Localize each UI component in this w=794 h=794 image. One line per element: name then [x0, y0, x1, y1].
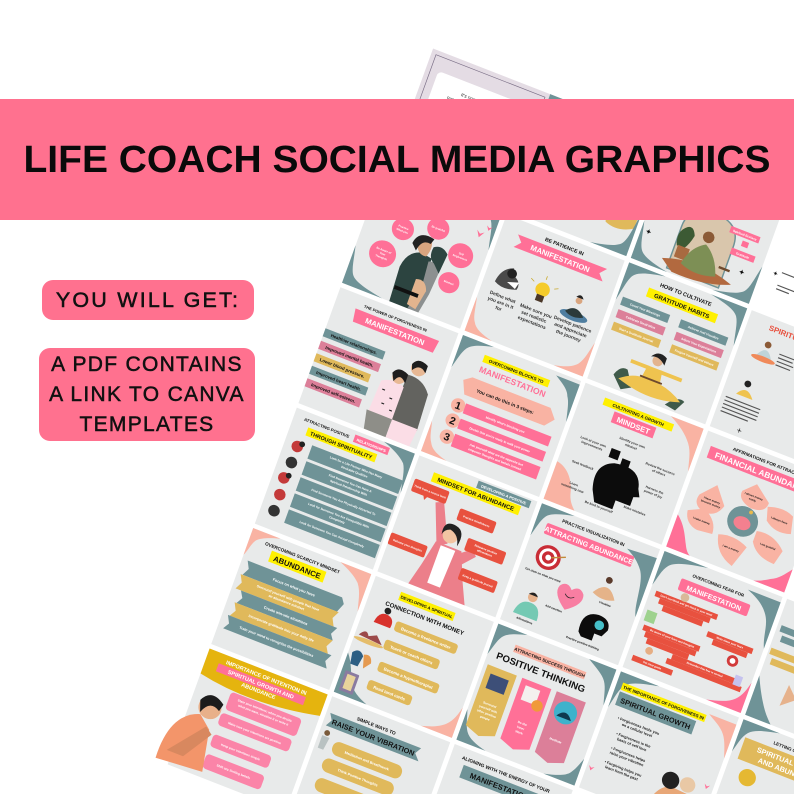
- intention bubbles: Shift any limiting beliefs: [216, 763, 251, 780]
- meditating figure: [610, 340, 697, 413]
- icon: thinking woman: [494, 263, 524, 293]
- speech bubbles: Think from a source level: [414, 484, 447, 500]
- column: mustard: people: [480, 714, 490, 722]
- card: attracting success positive thinking: [456, 624, 616, 786]
- step 1: 1: [453, 400, 463, 413]
- thinking man: [155, 683, 228, 775]
- benefit bars: Improved self-esteem.: [310, 382, 356, 404]
- card: text list spilling off right edge: ✦: [772, 270, 779, 278]
- three tips: Develop patience: [553, 315, 592, 335]
- column: mauve: [533, 691, 586, 769]
- card: attracting positive relationships: [255, 408, 415, 570]
- relationship bars: Desirable Qualities: [341, 465, 368, 479]
- intention bubbles: State your intentions; when you decide: [237, 698, 293, 723]
- card: cultivating a growth mindset: [544, 383, 704, 545]
- growth tips: Make mistakes: [623, 505, 646, 517]
- card: be patience in manifestation: [465, 215, 625, 377]
- red text blocks: Don't overthink and get stuck in your mind: [660, 593, 713, 617]
- ribbons: an abundance mindset: [268, 594, 305, 612]
- intention bubbles: what you want, visualize it or write it: [237, 703, 289, 727]
- card: importance of intention: ABUNDANCE: [240, 682, 276, 701]
- card: importance of intention: [155, 643, 328, 794]
- plant and pot: [671, 224, 697, 261]
- growth tips: Identify your own: [619, 436, 646, 450]
- growth tips: power of joy: [643, 489, 663, 500]
- title: ATTRACTING POSITIVE: [303, 417, 350, 439]
- step 3: empower thoughts and beliefs instead: [468, 447, 522, 471]
- card: how to cultivate gratitude habits: [587, 262, 747, 424]
- bullet list: raise your vibration: [609, 751, 645, 768]
- card: power of forgiveness: [298, 287, 458, 449]
- speech bubbles: [385, 477, 521, 593]
- habit tags: Count Your Blessings: [629, 302, 661, 318]
- bullet list: • Forgiveness heals you: [617, 716, 660, 736]
- subtitle ribbon: [459, 375, 558, 429]
- step 2: Decide that you're ready to walk your power: [469, 426, 531, 454]
- red text blocks: Be aware of your fears and thoughts: [650, 628, 695, 649]
- card: teal corner template: [508, 94, 668, 256]
- title: BE PATIENCE IN: [544, 237, 585, 258]
- card: lilac paper: [391, 48, 551, 210]
- pink advice circles: [365, 198, 482, 298]
- growth tips: Learn: [569, 481, 579, 488]
- column: pink: Do the: [517, 720, 528, 727]
- card: importance of forgiveness: THE IMPORTANCE OF FORGIVENESS IN: [622, 685, 705, 721]
- step 1: [449, 396, 552, 448]
- affirmation petals: I make money: [692, 515, 711, 526]
- pink advice circles: Be Aware of: [376, 245, 392, 255]
- card: lilac paper: It's normal to feel: [460, 92, 496, 111]
- callout: what the pdf contains: [39, 348, 255, 441]
- small icons: [633, 582, 763, 690]
- pink advice circles: Mindset: [443, 279, 454, 286]
- affirmation petals: I have money: [703, 495, 721, 505]
- card: cultivating a growth mindset: CULTIVATING A GROWTH: [612, 403, 665, 427]
- growth tips: Be kind to yourself: [584, 500, 614, 515]
- benefit bars: Healthier relationships.: [330, 333, 378, 355]
- speech bubbles: affirmations: [476, 548, 493, 558]
- speech bubbles: Practice mindfulness: [463, 514, 491, 528]
- affirmation petals: easily: [748, 497, 757, 503]
- three tips: [484, 290, 592, 347]
- column: mustard: [464, 664, 517, 742]
- card: practice visualization: Get clear on what you want: [525, 566, 561, 584]
- affirmation petals: I always have: [770, 515, 789, 526]
- intention bubbles: [202, 691, 302, 794]
- ribbons: Surround yourself with people that have: [256, 584, 320, 612]
- icon: yoga person: [592, 573, 621, 603]
- pills: Think Positive Thoughts: [337, 768, 378, 788]
- card: overcoming blocks to manifestation: [421, 335, 581, 497]
- step 3: 3: [442, 431, 452, 444]
- relationship bars: Look for Someone You Are Compatible With: [308, 502, 370, 529]
- card: overcoming scarcity mindset: ABUNDANCE: [272, 554, 322, 581]
- pink advice circles: Be grateful: [431, 224, 446, 233]
- card: spiritual figures: [710, 310, 794, 472]
- card: attracting positive relationships: THROUGH SPIRITUALITY: [309, 431, 373, 461]
- embracing couple: [360, 349, 440, 447]
- bullet list: on a cellular level: [621, 723, 653, 738]
- income ideas: Become a freelance writer: [400, 626, 452, 650]
- card: overcoming blocks to manifestation: OVERCOMING BLOCKS TO: [488, 358, 545, 385]
- relationship bars: Look for a Life Partner Who Has Many: [329, 455, 383, 479]
- habit tags: Celebrate Small Wins: [625, 315, 656, 330]
- card: right edge spiritual list: [745, 599, 794, 761]
- three tips: set realistic: [520, 310, 547, 325]
- red text blocks: [631, 591, 762, 701]
- growth tips: of others: [651, 468, 666, 477]
- card: how to cultivate gratitude habits: GRATITUDE HABITS: [653, 293, 710, 320]
- card: developing a spiritual connection: CONNECTION WITH MONEY: [384, 600, 465, 637]
- card: meditation woman: Gratitude: [735, 251, 750, 260]
- title: [482, 355, 550, 387]
- card: text list spilling off right edge: [753, 190, 794, 352]
- habit tags: Adjust Your Expectations: [681, 337, 717, 354]
- income ideas: Read tarot cards: [373, 685, 406, 702]
- speech bubbles: Reframe your thoughts: [392, 538, 423, 553]
- card: meditation woman: ✦: [644, 227, 653, 237]
- pink advice circles: Practice: [398, 224, 410, 231]
- affirmation petals: because money: [700, 498, 721, 510]
- kissing couple: [387, 201, 493, 327]
- title: [603, 398, 674, 432]
- ribbons: Create win-win situations: [263, 606, 308, 626]
- card: lilac paper: overwhelmed sometimes: [446, 95, 498, 120]
- title banner: LIFE COACH SOCIAL MEDIA GRAPHICS: [24, 139, 770, 181]
- step 2: 2: [448, 415, 457, 428]
- title: SIMPLE WAYS TO: [356, 716, 397, 737]
- benefit bars: [305, 328, 385, 410]
- habit tags: Forgive Yourself and Others: [674, 348, 714, 367]
- affirmation petals: [675, 464, 794, 582]
- bullet list: basis of self love: [616, 737, 647, 752]
- card: mindset for abundance: MINDSET FOR ABUNDANCE: [436, 477, 515, 513]
- title: HOW TO CULTIVATE: [659, 283, 712, 308]
- growth tips: something new: [561, 482, 585, 494]
- ribbons: Focus on what you have: [272, 578, 315, 598]
- card: practice visualization: Affirmations: [516, 616, 533, 626]
- habit tags: Start a Gratitude Journal: [618, 327, 654, 344]
- bullet list: learn from the past: [604, 765, 639, 782]
- card: simple ways to raise your vibration: RAISE YOUR VIBRATION: [331, 717, 416, 758]
- growth tips: improvements: [581, 440, 603, 452]
- icon: target: [532, 541, 568, 575]
- card: attracting success positive thinking: ATTRACTING SUCCESS THROUGH: [514, 646, 586, 678]
- income ideas: [366, 619, 459, 715]
- card: financial abundance affirmations: [666, 431, 794, 593]
- icon: head silhouette: [576, 610, 612, 645]
- column: mustard: Surround: [483, 700, 497, 709]
- red text blocks: Write down your fears: [716, 636, 744, 650]
- three tips: expectations: [517, 315, 547, 331]
- column: mustard: other positive: [476, 708, 497, 719]
- card: practice visualization: [500, 503, 660, 665]
- three tips: and appreciate: [553, 321, 588, 340]
- icon: piggy bank: [723, 501, 762, 541]
- card: practice visualization: ATTRACTING ABUNDANCE: [543, 525, 634, 567]
- card: practice visualization: Visualize: [598, 600, 612, 608]
- pink advice circles: Your: [379, 251, 386, 257]
- card: cultivating a growth mindset: MINDSET: [615, 415, 651, 436]
- card: letting go of spiritual abundance: [702, 719, 794, 794]
- title banner: [0, 99, 794, 220]
- couple icons: [265, 437, 306, 519]
- column: pink: Work: [515, 729, 524, 736]
- title: [398, 592, 456, 621]
- step 3: Ask yourself what are the opposite but: [469, 443, 524, 467]
- woman in pink suit: [406, 499, 495, 605]
- pills: [313, 739, 404, 794]
- card: developing a spiritual connection: [334, 576, 494, 738]
- card: attracting positive relationships: RELATIONSHIPS: [356, 438, 387, 453]
- column: mauve: Meditate: [549, 736, 562, 745]
- callout: what the pdf contains: TEMPLATES: [79, 413, 214, 436]
- speech bubbles: Keep a gratitude journal: [462, 573, 493, 589]
- red text blocks: Remember that fear is normal: [686, 661, 723, 678]
- card: aligning with the energy: ALIGNING WITH THE ENERGY OF YOUR: [461, 755, 551, 794]
- card: meditation woman: ✦: [738, 268, 746, 277]
- affirmation petals: I am a money: [722, 543, 740, 553]
- title: PRACTICE VISUALIZATION IN: [562, 518, 626, 548]
- step 2: [444, 411, 547, 463]
- pink advice circles: What you: [396, 227, 409, 235]
- card: mindset for abundance: DEVELOPING A POSITIVE: [480, 485, 527, 506]
- relationship bars: Find Someone You Are Physically Attracted To: [311, 488, 376, 516]
- icon: smiling heart: [552, 582, 585, 615]
- card: attracting success positive thinking: POSITIVE THINKING: [495, 651, 587, 695]
- card: importance of forgiveness: [579, 671, 739, 794]
- intention bubbles: Make sure your intentions are positive: [228, 721, 282, 745]
- three tips: for: [494, 305, 502, 313]
- ribbons: Train your mind to recognize the possibilities: [239, 626, 314, 658]
- bullet list: [600, 716, 660, 783]
- card: aligning with the energy: [413, 744, 573, 794]
- card: meditation woman: [631, 142, 791, 304]
- relationship bars: Completely: [328, 515, 346, 525]
- benefit bars: Improved mental health.: [325, 345, 374, 368]
- ribbons: [221, 560, 351, 669]
- relationship bars: Spiritual Relationship With: [330, 479, 368, 497]
- card: practice visualization: Practice positive thinking: [565, 635, 600, 652]
- card: overcoming fear for manifestation: [623, 551, 783, 713]
- affirmation petals: I attract money: [744, 491, 764, 502]
- card: developing a spiritual connection: DEVELOPING A SPIRITUAL: [400, 594, 454, 620]
- title: IMPORTANCE OF INTENTION IN: [225, 660, 307, 697]
- step 3: [438, 427, 541, 480]
- growth tips: Review the success: [645, 461, 675, 476]
- benefit bars: Improved heart health.: [315, 370, 362, 392]
- card: importance of intention: SPIRITUAL GROWTH AND: [227, 670, 294, 701]
- benefit bars: Lower blood pressure.: [319, 357, 365, 379]
- habit tags: Achieve And Visualize: [687, 325, 719, 341]
- title: [476, 481, 531, 508]
- icon: man writing: [513, 588, 545, 621]
- card: couple with pink circles: [342, 167, 502, 329]
- relationship bars: Find Someone You Can Have A: [328, 473, 373, 494]
- growth tips: Seek feedback: [571, 459, 594, 471]
- three tips: Make sure you: [519, 303, 553, 320]
- card: spiritual figures: +: [735, 425, 743, 436]
- card: mindset for abundance: [377, 455, 537, 617]
- card: meditation woman: Spiritual Ecstasy: [732, 229, 757, 242]
- card: power of forgiveness: MANIFESTATION: [364, 316, 426, 347]
- card: simple ways to raise your vibration: [290, 696, 450, 794]
- intention bubbles: Keep your intentions simple: [220, 743, 261, 762]
- income ideas: Become a hypnotherapist: [383, 666, 434, 690]
- pills: Meditation and Breathwork: [344, 751, 390, 772]
- column: pink: [498, 678, 551, 755]
- pink advice circles: Thoughts: [375, 253, 388, 262]
- card: overcoming fear for manifestation: MANIFESTATION: [685, 584, 742, 613]
- card: overcoming blocks to manifestation: MANIFESTATION: [478, 364, 547, 399]
- growth tips: Look at your own: [580, 435, 607, 449]
- income ideas: Teach or coach others: [389, 644, 434, 666]
- relationship bars: Look for Someone You Can Accept Completely: [299, 520, 365, 549]
- red text blocks: Set clear goals: [643, 660, 662, 671]
- seated woman: [679, 226, 740, 284]
- title: THE POWER OF FORGIVENESS IN: [363, 304, 428, 333]
- growth tips: [558, 422, 680, 531]
- three tips: you are in it: [487, 295, 515, 311]
- pink advice circles: forgiveness: [452, 253, 468, 262]
- callout: what the pdf contains: A PDF CONTAINS: [51, 353, 243, 376]
- title: [621, 682, 707, 722]
- title: [513, 645, 586, 679]
- icon: head with puzzle: [587, 446, 652, 517]
- callout: what the pdf contains: A LINK TO CANVA: [49, 383, 245, 406]
- pink advice circles: Self: [458, 251, 464, 257]
- embracing figures: [581, 742, 710, 794]
- callout: you will get: [42, 280, 254, 320]
- callout: you will get: YOU WILL GET:: [56, 288, 240, 312]
- title: OVERCOMING SCARCITY MINDSET: [264, 541, 341, 575]
- card: overcoming scarcity mindset: [211, 528, 371, 690]
- title: OVERCOMING FEAR FOR: [692, 573, 746, 598]
- three tips: Define what: [489, 290, 517, 305]
- three tips: the journey: [555, 329, 582, 344]
- growth tips: mindset: [624, 443, 638, 451]
- column: pink: Inner: [516, 725, 526, 732]
- column: mustard: yourself with: [479, 704, 498, 715]
- relationship bars: [284, 445, 403, 558]
- card: overcoming blocks to manifestation: You can do this in 3 steps:: [475, 388, 535, 416]
- bullet list: • Forgiveness helps: [610, 746, 646, 763]
- habit tags: [611, 297, 728, 371]
- speech bubbles: Rehearse positive: [474, 543, 498, 556]
- icon: light bulb: [525, 271, 561, 307]
- icon: yoga woman: [558, 290, 595, 326]
- bullet list: • Forgiveness is the: [616, 732, 651, 749]
- small figure: [318, 729, 332, 750]
- step 1: Identify what's blocking you: [485, 415, 525, 434]
- ribbons: Incorporate gratitude into your daily life: [248, 614, 314, 643]
- small figures: [335, 599, 397, 700]
- affirmation petals: I am grateful: [760, 542, 776, 551]
- bullet list: • Forgiving helps you: [604, 760, 643, 778]
- growth tips: Harness the: [645, 485, 664, 495]
- card: be patience in manifestation: MANIFESTATION: [529, 243, 591, 274]
- card: practice visualization: Add emotion: [545, 603, 563, 614]
- card: importance of forgiveness: SPIRITUAL GROWTH: [619, 696, 692, 731]
